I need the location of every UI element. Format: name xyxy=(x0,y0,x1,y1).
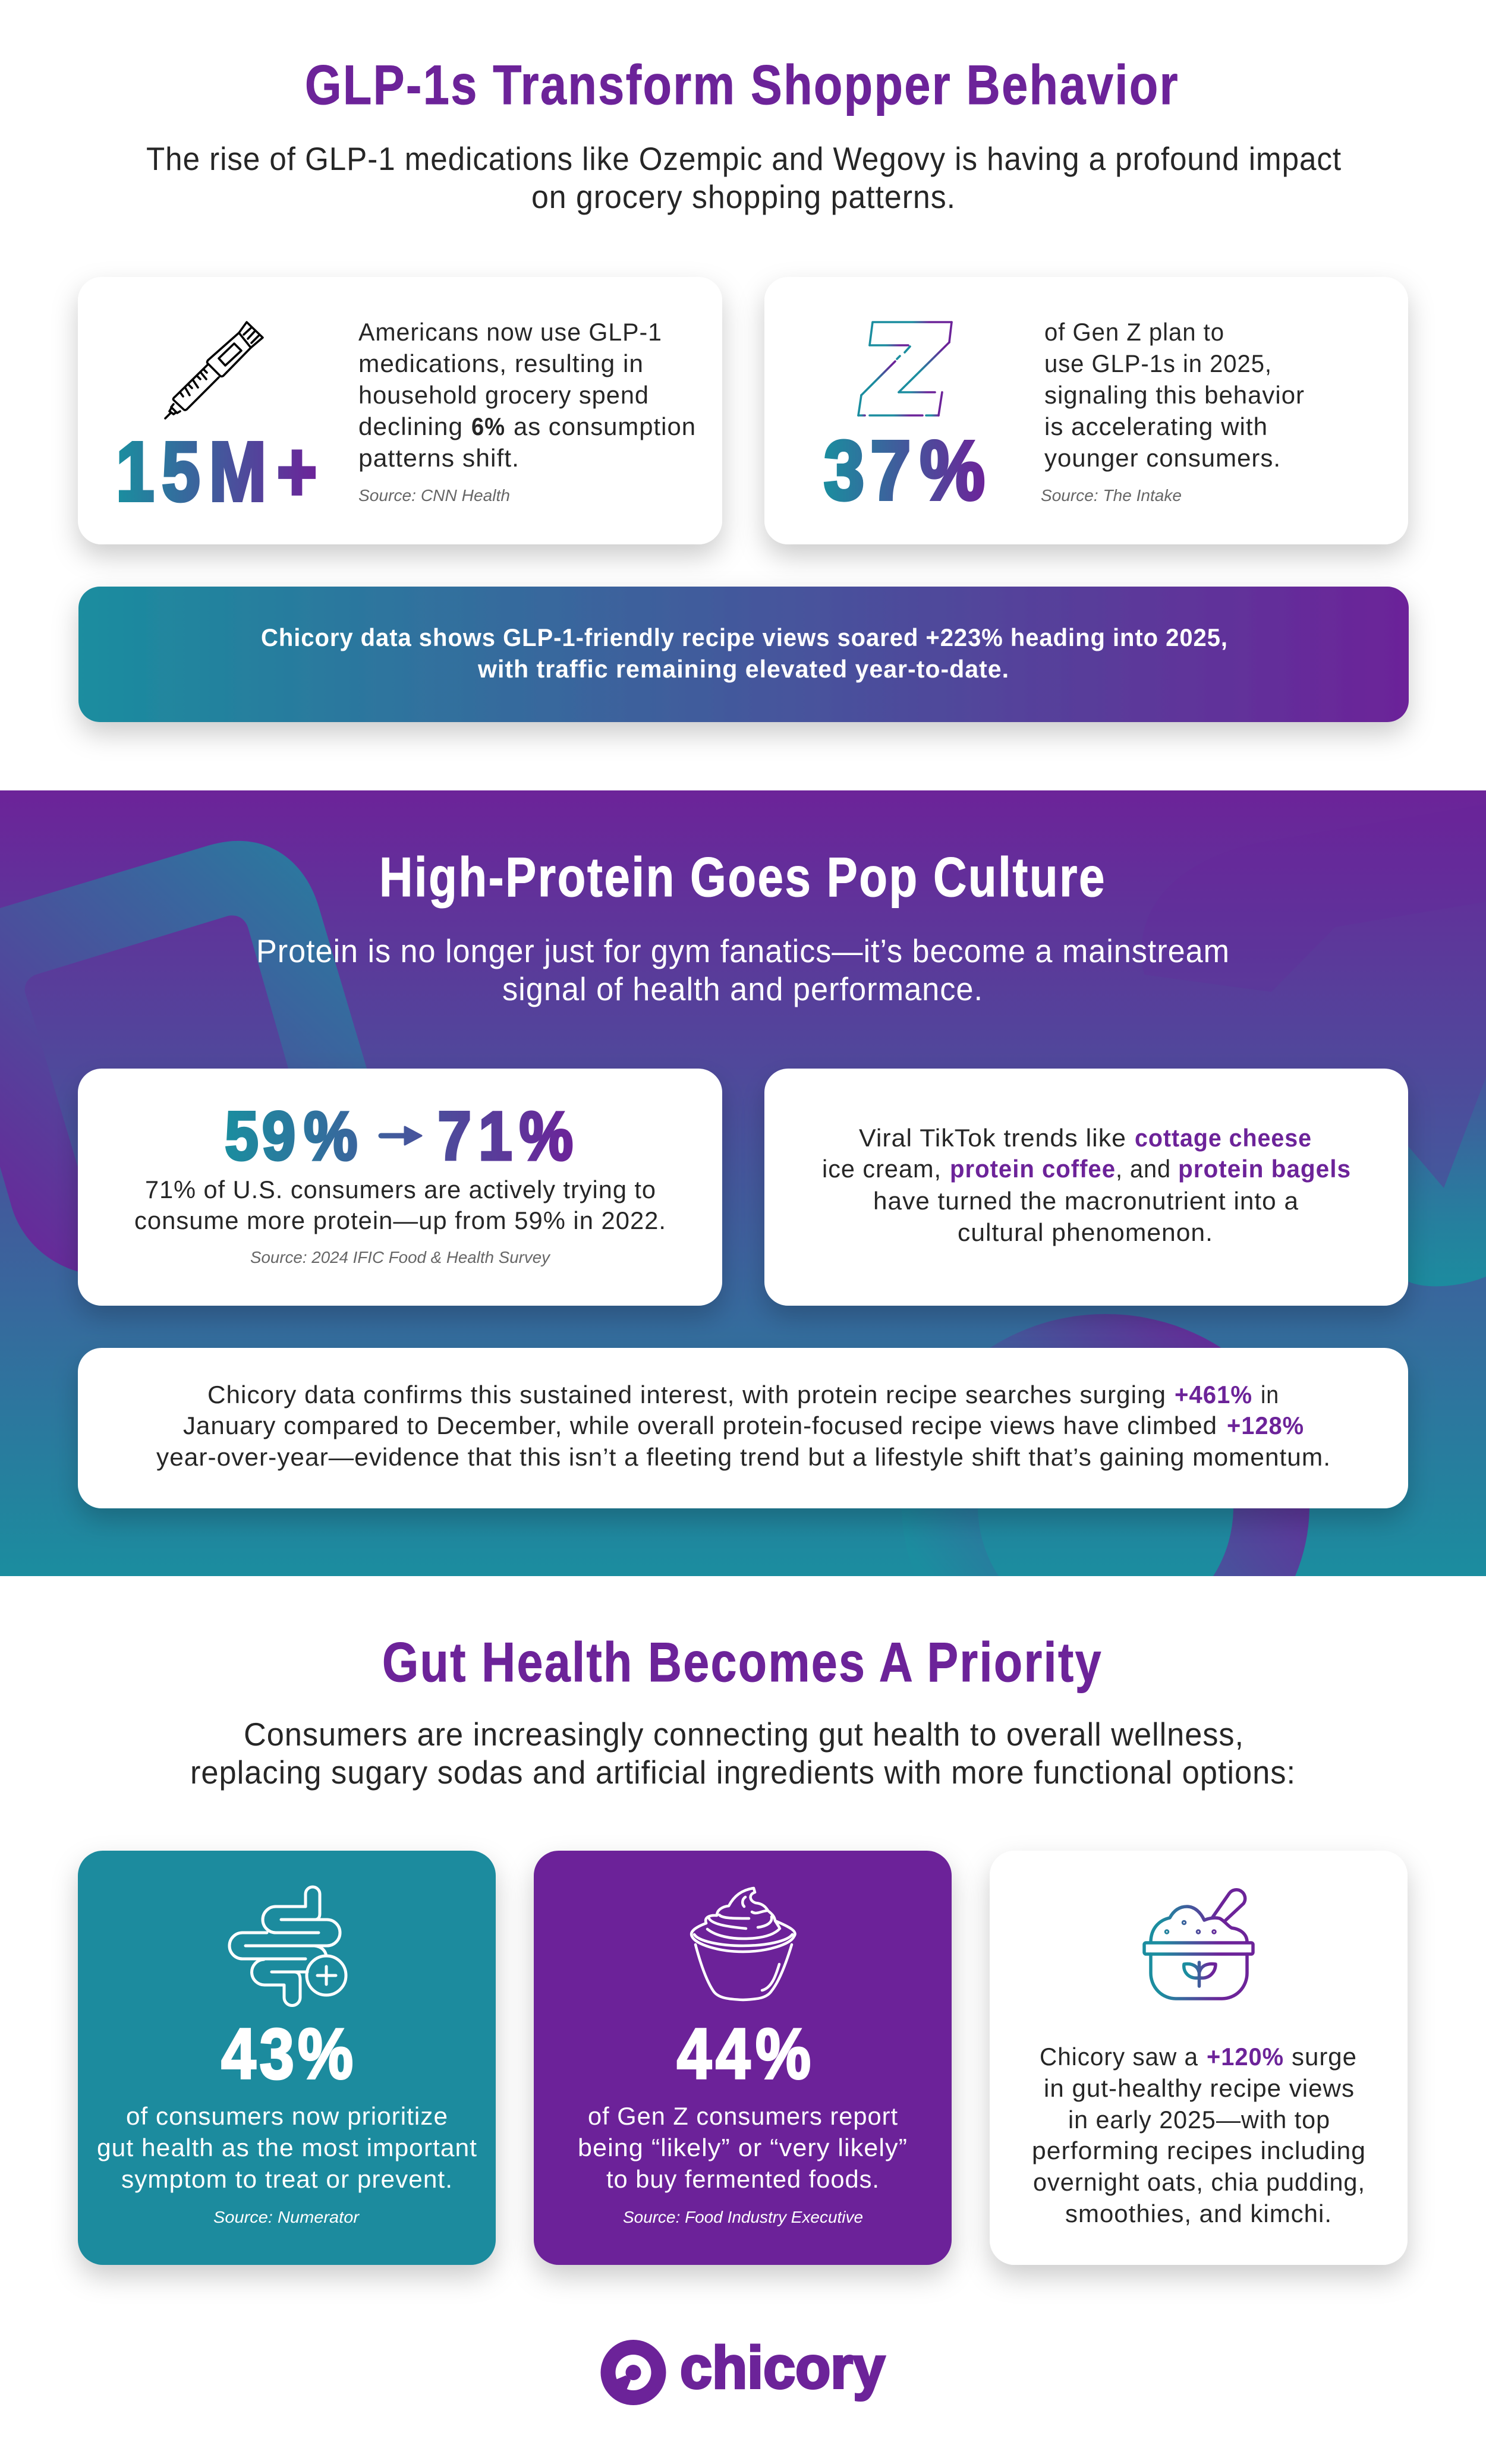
text: Gen Z fermented foods xyxy=(578,2102,908,2193)
subtitle: protein intro: Protein is no longer just for gym fanatics—it’s become a mainstream xyxy=(256,932,1230,969)
panel: Chicory protein data card: year-over-year—evidence that this isn’t a fleeting trend but a lifestyle shift that’s gaining momentum. xyxy=(156,1443,1331,1471)
arrow: 59 to 71 xyxy=(381,1127,421,1145)
stat: 15M+: 15M+ xyxy=(116,425,317,519)
panel: Chicory protein data card: in xyxy=(1261,1381,1279,1409)
subtitle: gut health intro: replacing sugary sodas and artificial ingredients with more functional options: xyxy=(190,1754,1296,1791)
panel: Chicory protein data card: +128% xyxy=(1227,1411,1304,1439)
text: +120% surge: in early 2025—with top xyxy=(1068,2106,1330,2134)
text: Americans now use GLP-1: medications, resulting in xyxy=(358,349,644,377)
text: consumers trying to consume protein: 71% of U.S. consumers are actively trying to xyxy=(145,1176,656,1203)
panel: 15M+ Americans card xyxy=(78,277,722,544)
text: of Gen Z plan: signaling this behavior xyxy=(1044,381,1305,409)
panel: viral TikTok trends card: ice cream, xyxy=(822,1155,942,1183)
text: of Gen Z plan: younger consumers. xyxy=(1044,444,1281,472)
subtitle: GLP-1 intro: on grocery shopping patterns. xyxy=(531,178,956,215)
section: GLP-1s xyxy=(78,53,1409,722)
text: +120% surge: overnight oats, chia pudding, xyxy=(1033,2168,1365,2196)
text: consumers trying to consume protein xyxy=(134,1176,666,1234)
subtitle: gut health intro: Consumers are increasingly connecting gut health to overall wellness, xyxy=(244,1716,1244,1753)
icon: letter Z outline xyxy=(858,322,952,415)
background shape: left rounded ring xyxy=(0,841,404,1277)
subtitle: protein intro: signal of health and performance. xyxy=(502,971,983,1007)
icon: bowl with spoon xyxy=(1144,1890,1253,1999)
icon: intestines with plus xyxy=(229,1887,346,2005)
icon: chicory mark xyxy=(600,2340,666,2405)
text: of Gen Z plan: of Gen Z plan to xyxy=(1044,318,1224,346)
text: +120% surge: in gut-healthy recipe views xyxy=(1044,2074,1355,2102)
text: +120% surge: smoothies, and kimchi. xyxy=(1065,2200,1332,2227)
stat: 71%: 71% xyxy=(438,1098,573,1174)
text: Gen Z fermented foods: of Gen Z consumers report xyxy=(588,2102,898,2130)
background shape: lower right blob xyxy=(1308,1067,1486,1286)
text: consumers trying to consume protein: consume more protein—up from 59% in 2022. xyxy=(134,1206,666,1234)
section: High-Protein xyxy=(0,790,1486,1576)
subtitle: protein intro xyxy=(256,932,1230,1007)
source: IFIC survey: Source: 2024 IFIC Food & Health Survey xyxy=(250,1248,551,1266)
text: Americans now use GLP-1: Americans now use GLP-1 xyxy=(358,318,662,346)
text: +120% surge xyxy=(1032,2043,1366,2227)
title: High-Protein Goes Pop Culture: High-Protein Goes Pop Culture xyxy=(379,846,1106,908)
panel: viral TikTok trends card: have turned the macronutrient into a xyxy=(873,1187,1299,1215)
text: consumers prioritize gut health: symptom to treat or prevent. xyxy=(121,2165,453,2193)
stat: 59%: 59% xyxy=(225,1098,357,1174)
source: CNN Health: Source: CNN Health xyxy=(358,486,510,505)
panel: Chicory protein data card: Chicory data confirms this sustained interest, with protein recipe searches surging xyxy=(207,1381,1166,1409)
callout: recipe views banner: with traffic remaining elevated year-to-date. xyxy=(477,655,1009,683)
callout: recipe views banner: Chicory data shows GLP-1-friendly recipe views soared +223% heading into 2025, xyxy=(261,623,1228,651)
text: of Gen Z plan: is accelerating with xyxy=(1044,412,1268,440)
text: of Gen Z plan xyxy=(1044,318,1305,472)
text: Gen Z fermented foods: being “likely” or “very likely” xyxy=(578,2134,908,2161)
panel: Chicory protein data card: +461% xyxy=(1175,1381,1252,1409)
text: consumers prioritize gut health xyxy=(97,2102,477,2193)
stat: 44%: 44% xyxy=(677,2014,811,2094)
title: GLP-1s Transform Shopper Behavior: GLP-1s Transform Shopper Behavior xyxy=(305,53,1179,116)
background shape: bottom ring xyxy=(902,1314,1309,1576)
source: Food Industry Executive: Source: Food Industry Executive xyxy=(623,2208,863,2226)
text: +120% surge: performing recipes including xyxy=(1032,2137,1366,2164)
title: Gut Health Becomes A Priority: Gut Health Becomes A Priority xyxy=(382,1631,1103,1693)
text: +120% surge: +120% xyxy=(1207,2043,1284,2071)
icon: pudding cup xyxy=(691,1888,795,2000)
text: consumers prioritize gut health: of consumers now prioritize xyxy=(126,2102,448,2130)
icon: injection pen xyxy=(165,322,263,418)
section: Gut Health xyxy=(78,1631,1408,2265)
text: Americans now use GLP-1: patterns shift. xyxy=(358,444,520,472)
logo: chicory xyxy=(600,2334,885,2405)
panel: viral TikTok trends card: cultural phenomenon. xyxy=(958,1218,1213,1246)
text: +120% surge: surge xyxy=(1292,2043,1357,2071)
panel: viral TikTok trends card: Viral TikTok trends like xyxy=(859,1124,1126,1152)
source: The Intake: Source: The Intake xyxy=(1041,486,1182,505)
callout: recipe views banner xyxy=(78,587,1409,722)
text: of Gen Z plan: use GLP-1s in 2025, xyxy=(1044,349,1272,377)
text: Americans now use GLP-1: household grocery spend xyxy=(358,381,649,409)
text: Gen Z fermented foods: to buy fermented foods. xyxy=(606,2165,880,2193)
panel: viral TikTok trends card: , and xyxy=(1116,1155,1171,1183)
stat: 37%: 37% xyxy=(824,424,985,518)
panel: 44% fermented foods card xyxy=(534,1851,952,2265)
text: Americans now use GLP-1: as consumption xyxy=(514,412,696,440)
stat: 43%: 43% xyxy=(221,2014,353,2094)
subtitle: gut health intro xyxy=(190,1716,1296,1791)
text: +120% surge: Chicory saw a xyxy=(1040,2043,1198,2071)
background shape: upper right band xyxy=(1141,804,1486,992)
panel: Chicory protein data card: January compared to December, while overall protein-focused recipe views have climbed xyxy=(183,1411,1217,1439)
subtitle: GLP-1 intro xyxy=(146,140,1342,215)
text: Americans now use GLP-1 xyxy=(358,318,696,472)
panel: viral TikTok trends card xyxy=(764,1069,1408,1306)
text: Americans now use GLP-1: declining xyxy=(358,412,463,440)
panel: Chicory gut-healthy recipes card xyxy=(990,1851,1408,2265)
text: Americans now use GLP-1: 6% xyxy=(471,412,505,440)
panel: 59% to 71% card xyxy=(78,1069,722,1306)
text: consumers prioritize gut health: gut health as the most important xyxy=(97,2134,477,2161)
panel: viral TikTok trends card: protein bagels xyxy=(1178,1155,1351,1183)
panel: viral TikTok trends card: cottage cheese xyxy=(1135,1124,1312,1152)
panel: viral TikTok trends card: protein coffee xyxy=(950,1155,1116,1183)
panel: 43% gut health card xyxy=(78,1851,496,2265)
subtitle: GLP-1 intro: The rise of GLP-1 medications like Ozempic and Wegovy is having a profound impact xyxy=(146,140,1342,177)
panel: Chicory protein data card xyxy=(78,1348,1408,1508)
panel: 37% Gen Z card xyxy=(764,277,1408,544)
source: Numerator: Source: Numerator xyxy=(213,2208,360,2226)
wordmark: chicory: chicory xyxy=(680,2334,885,2401)
